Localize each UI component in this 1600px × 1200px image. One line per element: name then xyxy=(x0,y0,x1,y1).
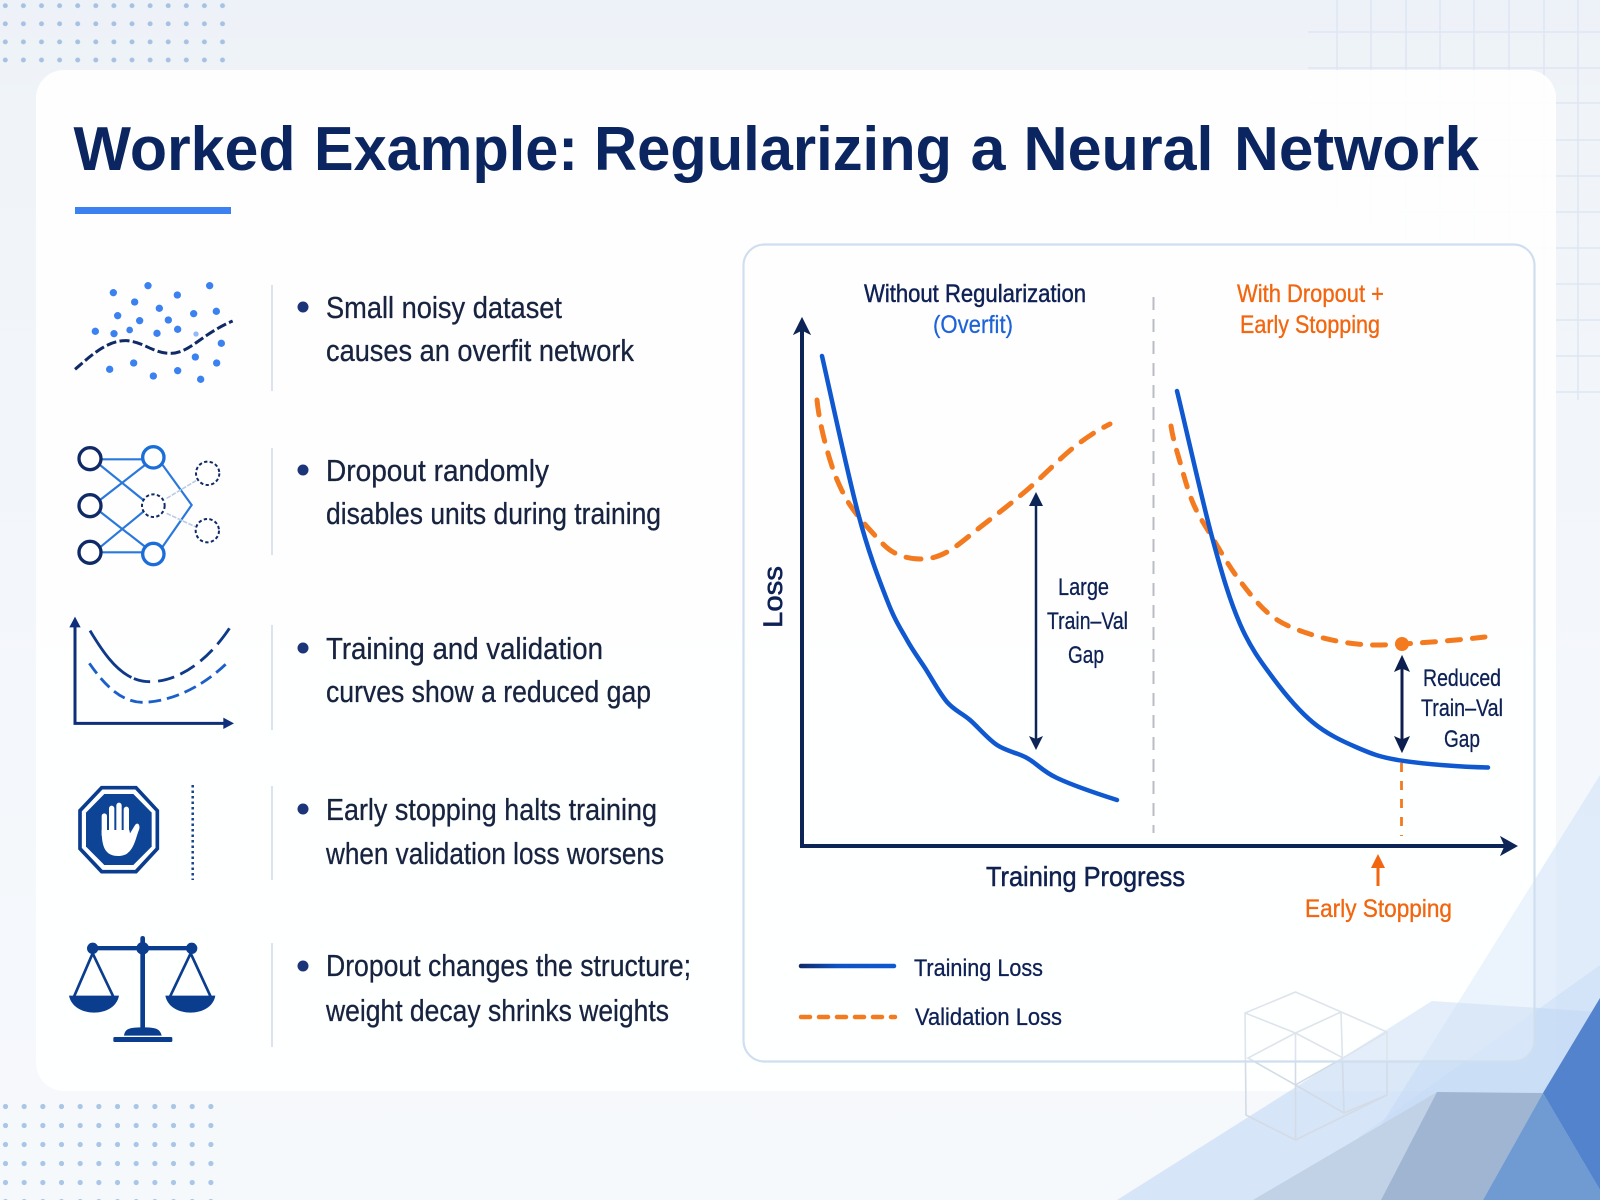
bullet text: Dropout changes the structure; xyxy=(326,949,691,983)
row 3: curves xyxy=(69,617,651,730)
bullet text: weight decay shrinks weights xyxy=(325,994,669,1028)
title: Neural xyxy=(1024,115,1214,184)
title: Worked xyxy=(74,115,296,184)
heading: without regularization xyxy=(864,280,1086,339)
label: early stopping: Early Stopping xyxy=(1305,895,1452,923)
background dot grid top left xyxy=(0,0,228,70)
dotted stop line xyxy=(191,785,194,880)
icon: balance scale xyxy=(69,936,215,1042)
legend xyxy=(801,955,1062,1031)
label: large train-val gap xyxy=(1047,574,1128,669)
bullet text xyxy=(298,632,651,709)
bullet text xyxy=(298,793,664,871)
curve: left validation loss xyxy=(817,400,1110,559)
divider xyxy=(271,943,273,1047)
bullet text: when validation loss worsens xyxy=(325,837,664,871)
label: reduced train-val gap: Train–Val xyxy=(1421,695,1503,722)
legend: validation loss: Validation Loss xyxy=(915,1004,1062,1031)
row 4: early stopping xyxy=(80,785,664,880)
bullet text: disables units during training xyxy=(326,497,661,531)
label: reduced train-val gap: Gap xyxy=(1444,726,1480,753)
early stopping point xyxy=(1395,637,1409,651)
label: large train-val gap: Large xyxy=(1058,574,1109,601)
row 2: dropout xyxy=(79,447,661,565)
heading: with dropout and early stopping xyxy=(1237,280,1384,339)
title: Network xyxy=(1234,115,1480,184)
curve: left training loss xyxy=(822,356,1117,800)
bullet text xyxy=(298,291,635,368)
bullet text: Early stopping halts training xyxy=(326,793,657,827)
decorative cube wireframe xyxy=(1245,992,1387,1140)
icon: loss curves on axes xyxy=(69,617,234,729)
arrow: large gap xyxy=(1029,492,1043,750)
heading: with dropout and early stopping: Early Stopping xyxy=(1240,311,1380,339)
label: large train-val gap: Gap xyxy=(1068,642,1104,669)
center divider xyxy=(1152,297,1154,833)
heading: without regularization: Without Regularization xyxy=(864,280,1086,308)
icon: neural network with dropped units xyxy=(79,447,219,565)
label: large train-val gap: Train–Val xyxy=(1047,608,1128,635)
axes xyxy=(794,318,1517,855)
divider xyxy=(271,448,273,555)
bullet text xyxy=(298,949,691,1028)
row 1: noisy dataset xyxy=(75,282,635,391)
y axis label: Loss xyxy=(758,566,788,628)
heading: without regularization: (Overfit) xyxy=(933,311,1013,339)
title: Example: xyxy=(314,115,578,184)
title xyxy=(74,115,1480,184)
arrow: early stopping marker xyxy=(1371,854,1385,886)
arrow: reduced gap xyxy=(1395,656,1409,752)
icon: stop sign with hand xyxy=(80,788,157,872)
bullet text: curves show a reduced gap xyxy=(326,675,651,709)
background grid top right xyxy=(1308,0,1600,400)
heading: with dropout and early stopping: With Dropout + xyxy=(1237,280,1384,308)
panel: loss curve chart xyxy=(744,244,1534,1062)
early stopping drop line xyxy=(1400,763,1403,836)
panel: bullet list xyxy=(69,282,691,1047)
curve: right validation loss xyxy=(1171,426,1485,645)
label: reduced train-val gap xyxy=(1421,665,1503,753)
x axis label: Training Progress xyxy=(986,861,1185,892)
bullet text xyxy=(298,454,661,531)
title: Regularizing xyxy=(594,115,952,184)
divider xyxy=(271,625,273,730)
icon: scattered data points with dashed curve xyxy=(75,282,233,383)
bullet text: Training and validation xyxy=(326,632,603,666)
divider xyxy=(271,285,273,391)
bullet text: causes an overfit network xyxy=(326,334,635,368)
curve: right training loss xyxy=(1177,391,1488,768)
row 5: dropout vs weight decay xyxy=(69,936,691,1047)
label: reduced train-val gap: Reduced xyxy=(1423,665,1501,692)
title: a xyxy=(970,115,1006,184)
divider xyxy=(271,786,273,880)
decorative polygons bottom right xyxy=(1117,775,1600,1200)
legend: training loss: Training Loss xyxy=(914,955,1043,982)
background dot grid bottom left xyxy=(0,1097,218,1200)
chart border xyxy=(744,244,1534,1062)
bullet text: Dropout randomly xyxy=(326,454,550,488)
bullet text: Small noisy dataset xyxy=(326,291,562,325)
title underline xyxy=(75,207,231,214)
